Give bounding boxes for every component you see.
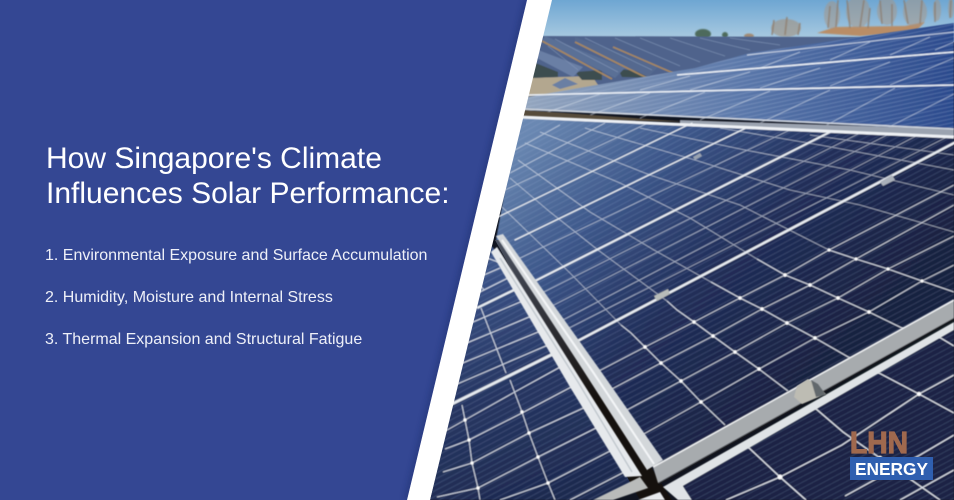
distant solar rows [527, 36, 860, 97]
photo: solar panel array [420, 0, 954, 500]
panel edge shade [407, 0, 527, 500]
clamp on lower frame [794, 379, 826, 404]
white diagonal stripe [400, 0, 552, 500]
logo word ENERGY: ENERGY [855, 459, 928, 479]
cell grid lines, central panel [597, 185, 954, 435]
logo word LHN: LHN [850, 425, 908, 460]
front solar array [496, 117, 954, 462]
treeline in the distance [695, 0, 954, 39]
list item 2: 2. Humidity, Moisture and Internal Stress [45, 289, 333, 306]
lower-right solar array [684, 330, 954, 500]
logo: LHN Energy [850, 425, 933, 480]
cell grid lines, upper panels [502, 123, 954, 330]
lower-left solar array [425, 246, 646, 500]
logo box [850, 457, 933, 480]
panel frame rails [498, 123, 954, 345]
list item 3: 3. Thermal Expansion and Structural Fatigue [45, 331, 362, 348]
silver frame rails [491, 234, 954, 500]
central gap between arrays [495, 240, 672, 500]
blue panel [0, 0, 527, 500]
title: How Singapore's Climate [46, 142, 382, 175]
sky [530, 0, 954, 42]
cell junction dots [643, 248, 924, 404]
title: Influences Solar Performance: [46, 177, 450, 210]
clamps on the rails [654, 289, 670, 301]
upper solar array [523, 23, 954, 137]
list item 1: 1. Environmental Exposure and Surface Accumulation [45, 247, 427, 264]
